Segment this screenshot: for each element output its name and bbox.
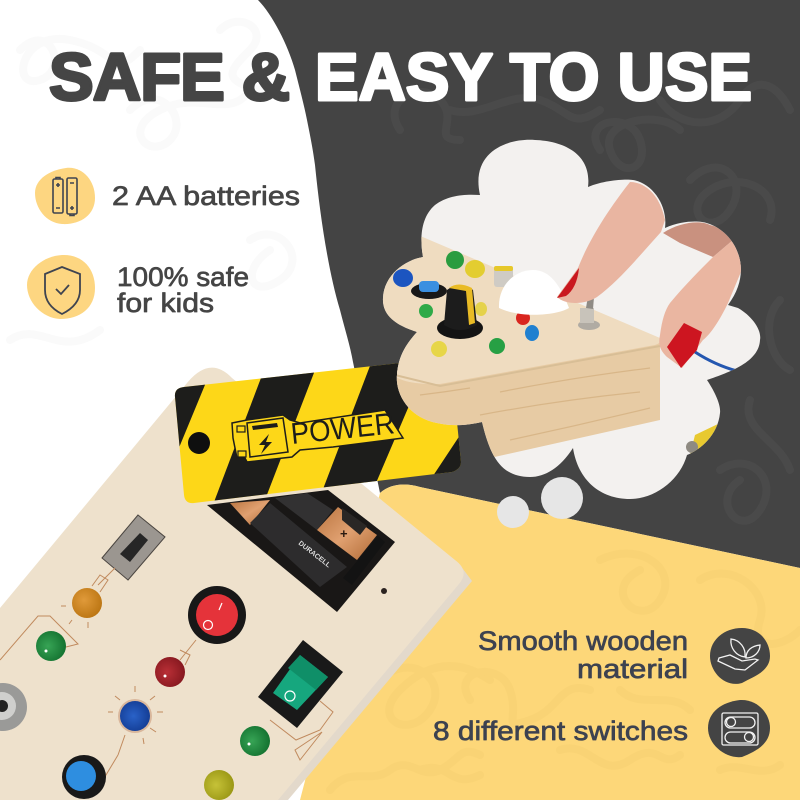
cloud background [382, 140, 760, 499]
wooden block side [385, 340, 660, 458]
icon: shield [27, 255, 95, 319]
title [49, 40, 752, 115]
label: smooth wooden material: material [577, 654, 688, 684]
wooden block edge line [395, 346, 660, 386]
label: 100% safe for kids: for kids [117, 288, 214, 318]
second finger [659, 240, 743, 368]
label: smooth wooden material: Smooth wooden [478, 626, 688, 656]
thought cloud photo [382, 140, 760, 499]
background: yellow area squiggles [330, 554, 800, 790]
green switch [423, 240, 446, 260]
battery compartment [207, 490, 395, 612]
icon: switches [708, 700, 770, 757]
LED: green lower [240, 726, 270, 756]
LED: blue [118, 699, 152, 733]
second fingernail [667, 323, 702, 368]
LED: orange [72, 588, 102, 618]
LED: yellow [204, 770, 234, 800]
blue wire [695, 352, 737, 371]
label: 100% safe for kids [117, 262, 249, 318]
tag yellow base [174, 363, 461, 504]
icon: plant in hand [710, 628, 770, 684]
wooden block top [382, 236, 660, 384]
title: EASY TO USE [315, 40, 752, 115]
LEDs on block [393, 251, 539, 357]
rocker: red [188, 586, 246, 644]
icon: batteries [35, 168, 95, 224]
background: dark area [258, 0, 800, 568]
background: yellow area [300, 485, 800, 800]
screw hole [381, 588, 387, 594]
power logo: POWER [289, 407, 396, 451]
glowing light [499, 270, 569, 315]
board side [270, 565, 472, 800]
tag screw [188, 432, 210, 454]
LED: green [36, 631, 66, 661]
power logo [232, 407, 403, 462]
wood grain [420, 368, 650, 440]
push button: blue [62, 755, 106, 799]
toggle switch [578, 298, 600, 330]
label: 2 AA batteries: 2 AA batteries [112, 181, 300, 211]
thought bubble: large [541, 477, 583, 519]
label: 8 different switches: 8 different switches [433, 716, 688, 746]
back of second finger [663, 222, 733, 257]
power tag [174, 363, 461, 504]
tag black stripes [174, 363, 461, 500]
wooden busy board [0, 368, 472, 800]
label: smooth wooden material [478, 626, 688, 684]
key switch [0, 683, 27, 731]
background: white area squiggles [10, 22, 292, 342]
board top face [0, 368, 464, 800]
index finger [557, 182, 665, 303]
title: SAFE & [49, 40, 290, 115]
rocker: green [258, 640, 343, 728]
label: 100% safe for kids: 100% safe [117, 262, 249, 292]
thought bubble: small [497, 496, 529, 528]
LED: red [155, 657, 185, 687]
small clip [686, 424, 718, 454]
background: dark area squiggles [395, 85, 790, 521]
battery compartment: + [340, 526, 348, 541]
index fingernail [557, 268, 579, 298]
battery compartment: DURACELL [297, 540, 332, 570]
black knob [437, 284, 483, 339]
slide switch [102, 515, 165, 580]
copper traces [0, 568, 333, 785]
